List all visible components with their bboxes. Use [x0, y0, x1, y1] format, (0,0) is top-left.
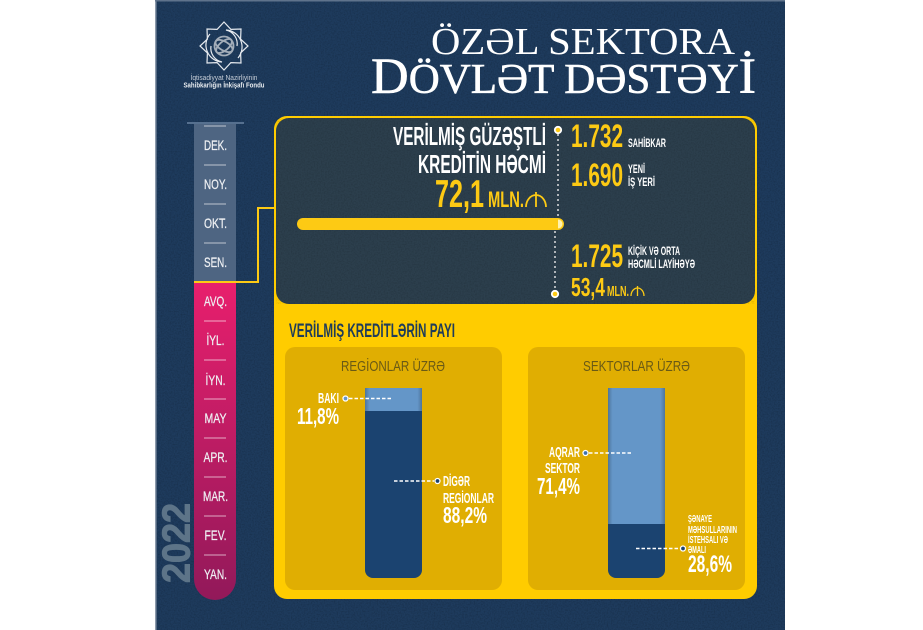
year label: 2022 — [156, 503, 198, 583]
stat: entrepreneurs: SAHİBKAR — [628, 135, 666, 150]
panel heading: REGİONLAR ÜZRƏ — [341, 357, 445, 375]
progress bar — [297, 218, 564, 230]
callout: Baku: BAKI — [318, 390, 339, 407]
active months scale — [194, 282, 236, 600]
stat: project amount: 53,4 — [571, 272, 605, 302]
callout: industrial products: İSTEHSALI VƏ — [688, 533, 728, 546]
stacked bar — [365, 388, 422, 578]
callout: agrarian sector: SEKTOR — [545, 460, 580, 477]
month labels: MAY — [204, 410, 227, 426]
title — [371, 21, 756, 105]
icon: manat — [526, 192, 546, 207]
callout: other regions — [394, 473, 494, 528]
heading: loan volume: KREDİTİN HƏCMİ — [418, 149, 546, 179]
elapsed months scale — [194, 124, 236, 282]
panel: by sectors — [528, 347, 745, 590]
month labels: YAN. — [204, 566, 227, 582]
title: ÖZƏL SEKTORA — [431, 21, 736, 63]
month labels: SEN. — [204, 254, 227, 270]
stat: projects: KİÇİK VƏ ORTA — [628, 243, 680, 258]
callout: industrial products: ƏMALI — [688, 545, 706, 556]
callout: industrial products: MƏHSULLARININ — [688, 525, 737, 536]
stacked bar — [608, 388, 665, 578]
logo text — [184, 73, 264, 90]
total amount: 72,1 — [435, 173, 484, 216]
month labels: DEK. — [204, 137, 227, 153]
heading: share of loans: VERİLMİŞ KREDİTLƏRİN PAYI — [289, 321, 455, 342]
yellow panel — [274, 116, 757, 599]
month labels: AVQ. — [204, 293, 227, 309]
title: DÖVLƏT DƏSTƏYİ — [371, 49, 756, 105]
stat: projects: 1.725 — [571, 238, 623, 274]
panel heading: SEKTORLAR ÜZRƏ — [583, 357, 690, 375]
stat: projects: HƏCMLİ LAYİHƏYƏ — [628, 256, 695, 271]
callout: industrial products: ŞƏNAYE — [688, 514, 712, 525]
callout: agrarian sector: 71,4% — [537, 473, 580, 499]
logo text: İqtisadiyyat Nazirliyinin — [190, 73, 258, 82]
callout: agrarian sector: AQRAR — [549, 444, 580, 461]
callout: other regions: REGİONLAR — [443, 490, 494, 507]
total amount: MLN. — [488, 187, 524, 212]
month labels: OKT. — [204, 215, 227, 231]
callout: industrial products: 28,6% — [688, 551, 732, 578]
connector arrow — [194, 208, 275, 282]
month labels: İYL. — [206, 331, 224, 348]
icon: manat small — [631, 286, 644, 296]
month labels: MAR. — [203, 488, 228, 504]
callout: Baku — [297, 390, 393, 429]
dotted timeline — [552, 127, 561, 297]
callout: other regions: 88,2% — [443, 502, 487, 528]
callout: industrial products — [636, 514, 737, 578]
month labels — [203, 137, 228, 582]
poster background — [155, 0, 785, 630]
icon: eight-point star emblem — [200, 22, 248, 70]
panel: loan volume — [276, 118, 755, 304]
stat: project amount — [571, 272, 644, 302]
month labels: FEV. — [204, 527, 226, 543]
stat: new jobs: 1.690 — [571, 157, 623, 193]
month labels: İYN. — [206, 371, 226, 388]
callout: Baku: 11,8% — [297, 403, 339, 429]
stat: new jobs: YENİ — [628, 161, 645, 176]
thermometer timeline — [187, 122, 244, 600]
panel: by regions — [285, 347, 502, 590]
callout: agrarian sector — [537, 444, 633, 499]
total amount — [435, 173, 546, 216]
month labels: NOY. — [204, 176, 227, 192]
heading: loan volume: VERİLMİŞ GÜZƏŞTLİ — [393, 121, 546, 151]
stat: new jobs: İŞ YERİ — [628, 174, 655, 189]
stat: entrepreneurs: 1.732 — [571, 118, 623, 154]
logo text: Sahibkarlığın İnkişafı Fondu — [184, 82, 264, 90]
stat: project amount: MLN. — [607, 283, 629, 300]
callout: other regions: DİGƏR — [443, 473, 470, 490]
logo — [184, 22, 264, 90]
stat: projects — [571, 238, 695, 274]
month labels: APR. — [204, 449, 228, 465]
heading: loan volume — [393, 121, 546, 179]
